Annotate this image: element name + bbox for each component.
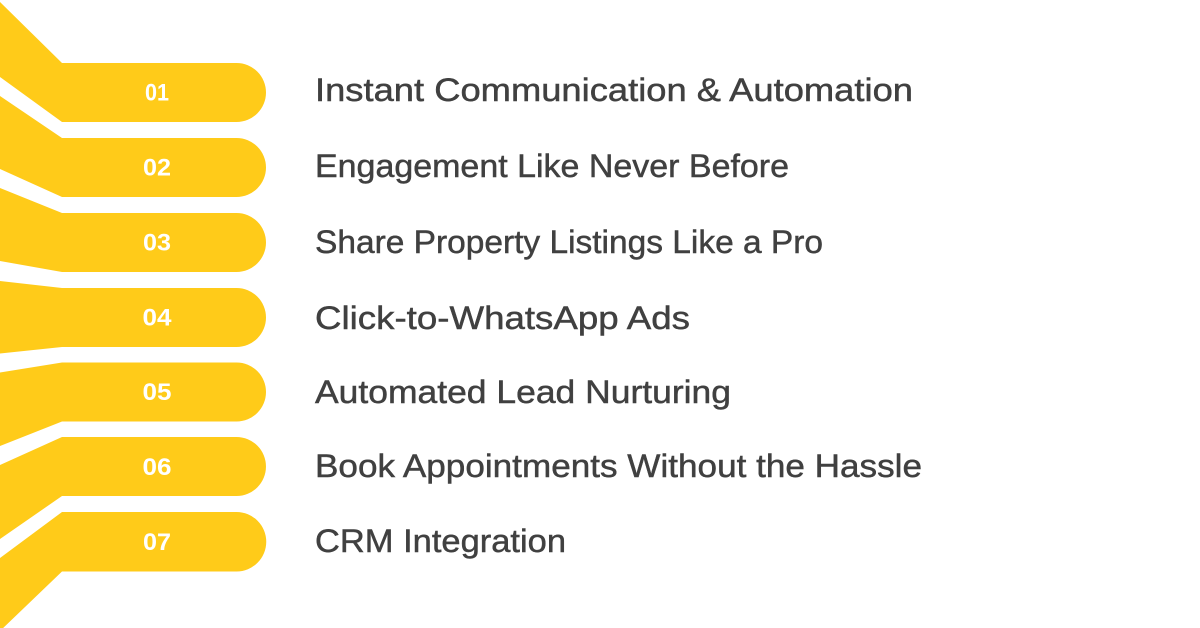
label 02: Engagement Like Never Before	[315, 148, 789, 184]
number 06: 06	[142, 454, 172, 481]
band 03	[0, 188, 266, 272]
number 07: 07	[143, 529, 171, 556]
number 02: 02	[143, 154, 171, 182]
band 06	[0, 437, 266, 539]
band 07	[0, 512, 266, 628]
label 05: Automated Lead Nurturing	[315, 374, 731, 410]
number 03: 03	[143, 230, 171, 256]
item 06	[0, 437, 922, 539]
band 01	[0, 2, 266, 122]
label 03: Share Property Listings Like a Pro	[315, 224, 823, 260]
band 04	[0, 281, 266, 354]
label 01: Instant Communication & Automation	[315, 72, 913, 108]
band 02	[0, 96, 266, 197]
label 04: Click-to-WhatsApp Ads	[315, 300, 690, 336]
label 07: CRM Integration	[315, 523, 566, 559]
item 04	[0, 281, 690, 354]
number 01: 01	[145, 80, 169, 106]
item 02	[0, 96, 789, 197]
number 05: 05	[142, 379, 172, 406]
band 05	[0, 362, 266, 446]
item 03	[0, 188, 823, 272]
item 01	[0, 2, 913, 122]
label 06: Book Appointments Without the Hassle	[315, 448, 922, 484]
item 05	[0, 362, 731, 446]
number 04: 04	[142, 304, 172, 332]
item 07	[0, 512, 566, 628]
